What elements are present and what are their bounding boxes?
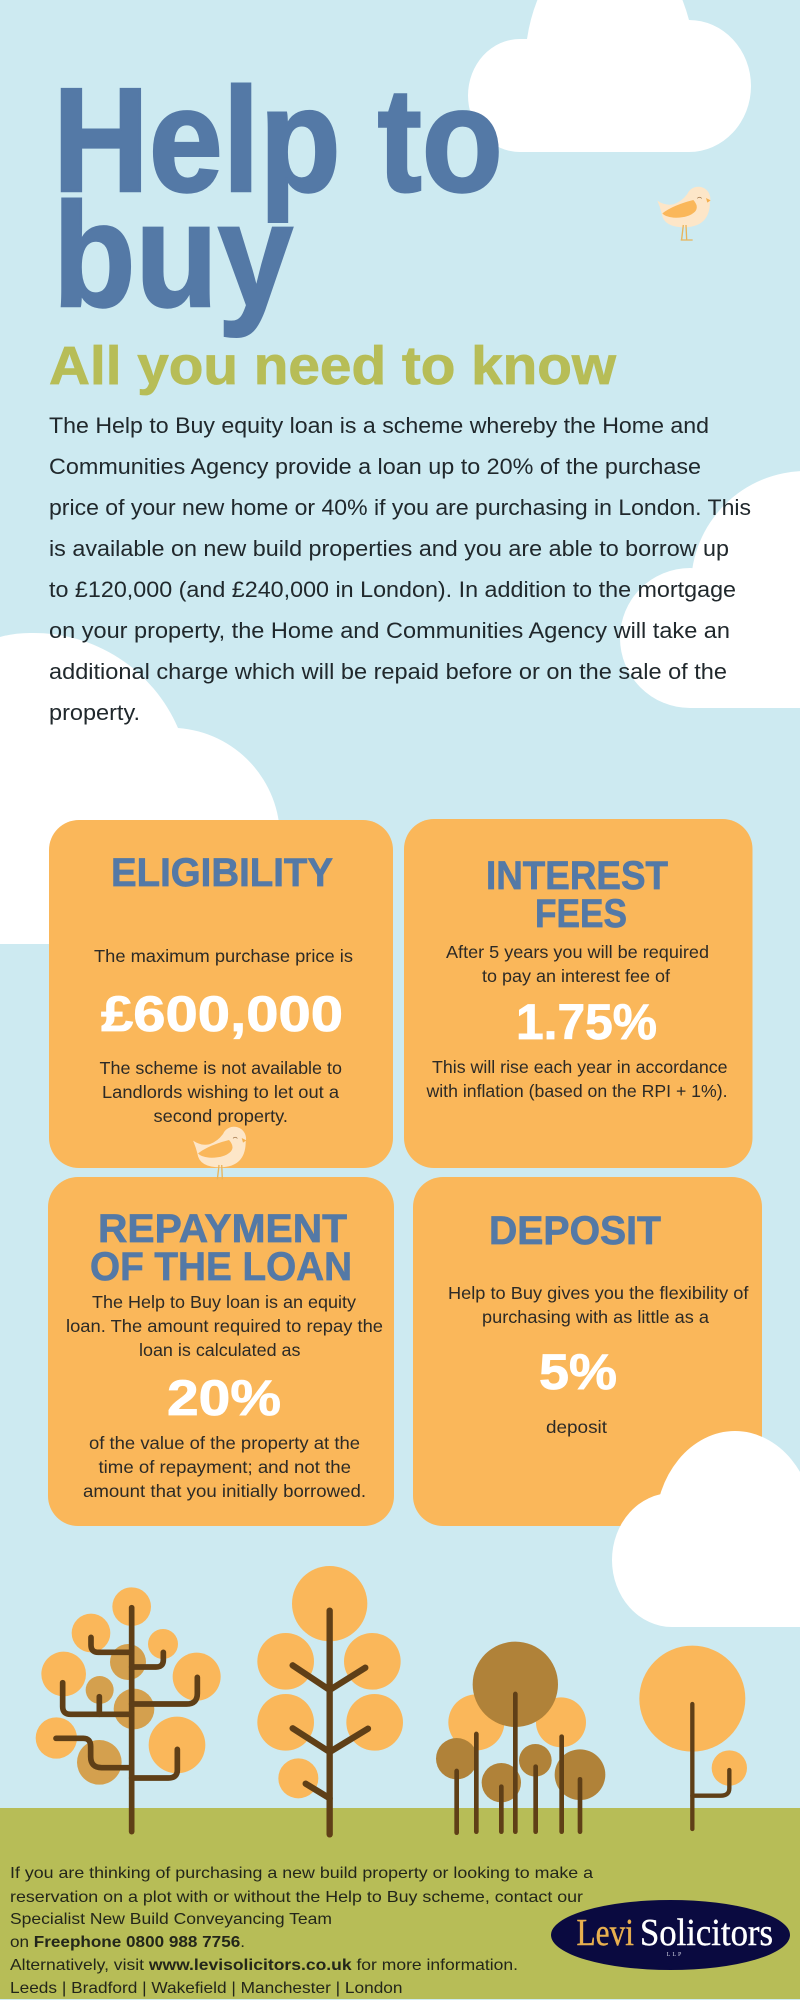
subtitle: All you need to know (49, 336, 617, 396)
number: 5%: 5% (539, 1344, 617, 1400)
text: after 5 years: After 5 years you will be required (446, 942, 709, 962)
footer text: If you are thinking of purchasing a new build property or looking to make a (10, 1865, 593, 1882)
text: equity loan (66, 1292, 383, 1360)
intro paragraph: property. (49, 700, 140, 725)
panel: repayment of the loan (48, 1177, 394, 1526)
text: value of property: time of repayment; and not the (98, 1457, 351, 1477)
text: eligibility note (100, 1058, 342, 1126)
logo: Levi Solicitors (551, 1900, 790, 1970)
intro paragraph (49, 413, 751, 725)
text: eligibility note: second property. (154, 1106, 288, 1126)
heading: eligibility: ELIGIBILITY (111, 851, 333, 895)
title: Help to (53, 57, 503, 223)
text: eligibility note: The scheme is not available to (100, 1058, 342, 1078)
text: inflation note (425, 1057, 728, 1101)
logo: Levi Solicitors: LLP (667, 1952, 683, 1958)
footer text: Specialist New Build Conveyancing Team (10, 1911, 332, 1928)
intro paragraph: is available on new build properties and you are able to borrow up (49, 536, 729, 561)
footer text: reservation on a plot with or without the Help to Buy scheme, contact our (10, 1889, 584, 1906)
title: buy (53, 173, 293, 338)
tree 2 (257, 1566, 403, 1834)
text: value of property: amount that you initially borrowed. (83, 1481, 366, 1501)
tree 1 (36, 1587, 221, 1832)
footer text (10, 1865, 593, 1997)
heading: interest fees: FEES (535, 892, 627, 936)
number: 1.75%: 1.75% (516, 994, 657, 1050)
text: flexibility: Help to Buy gives you the flexibility of (448, 1283, 749, 1303)
heading: deposit: DEPOSIT (489, 1209, 661, 1253)
icon: bird on card (193, 1127, 246, 1179)
text: equity loan: The Help to Buy loan is an equity (92, 1292, 356, 1312)
title (53, 57, 503, 338)
text: after 5 years: to pay an interest fee of (482, 966, 670, 986)
intro paragraph: The Help to Buy equity loan is a scheme whereby the Home and (49, 413, 709, 438)
footer text: on Freephone 0800 988 7756 . (10, 1934, 245, 1951)
footer text: Leeds | Bradford | Wakefield | Manchester | London (10, 1980, 402, 1997)
intro paragraph: additional charge which will be repaid before or on the sale of the (49, 659, 727, 684)
tree group 3 (436, 1642, 605, 1833)
tree 4 (639, 1646, 747, 1829)
number: 600,000: £600,000 (101, 986, 343, 1042)
heading: repayment: REPAYMENT (98, 1207, 347, 1251)
logo: Levi Solicitors: Solicitors (640, 1912, 773, 1954)
intro paragraph: Communities Agency provide a loan up to 20% of the purchase (49, 454, 701, 479)
text: after 5 years (446, 942, 709, 986)
logo: Levi Solicitors: Levi (576, 1912, 634, 1954)
panel: interest fees (404, 819, 752, 1168)
cloud: top right (468, 0, 751, 152)
ground (0, 1808, 800, 1999)
text: maximum price: The maximum purchase price is (94, 946, 353, 966)
text: value of property: of the value of the property at the (89, 1433, 360, 1453)
text: inflation note: with inflation (based on the RPI + 1%). (425, 1081, 728, 1101)
panel: eligibility (49, 820, 393, 1168)
text: inflation note: This will rise each year in accordance (432, 1057, 728, 1077)
icon: bird on sky (657, 187, 711, 240)
heading: interest fees: INTEREST (486, 854, 668, 898)
cloud: middle right (620, 471, 800, 708)
panel: deposit (413, 1177, 762, 1526)
text: equity loan: loan is calculated as (139, 1340, 301, 1360)
text: flexibility (448, 1283, 749, 1327)
text: eligibility note: Landlords wishing to let out a (102, 1082, 339, 1102)
text: value of property (83, 1433, 366, 1501)
heading: repayment: OF THE LOAN (90, 1245, 352, 1289)
cloud: bottom right (612, 1431, 800, 1627)
text: equity loan: loan. The amount required to repay the (66, 1316, 383, 1336)
heading: interest fees (486, 854, 668, 936)
intro paragraph: to £120,000 (and £240,000 in London). In addition to the mortgage (49, 577, 736, 602)
intro paragraph: price of your new home or 40% if you are purchasing in London. This (49, 495, 751, 520)
heading: repayment (90, 1207, 352, 1289)
intro paragraph: on your property, the Home and Communities Agency will take an (49, 618, 730, 643)
footer text: Alternatively, visit www.levisolicitors.co.uk for more information. (10, 1957, 518, 1974)
number: 20%: 20% (167, 1370, 281, 1426)
cloud: middle left (0, 633, 280, 944)
text: flexibility: purchasing with as little as a (482, 1307, 709, 1327)
text: deposit: deposit (546, 1417, 607, 1437)
